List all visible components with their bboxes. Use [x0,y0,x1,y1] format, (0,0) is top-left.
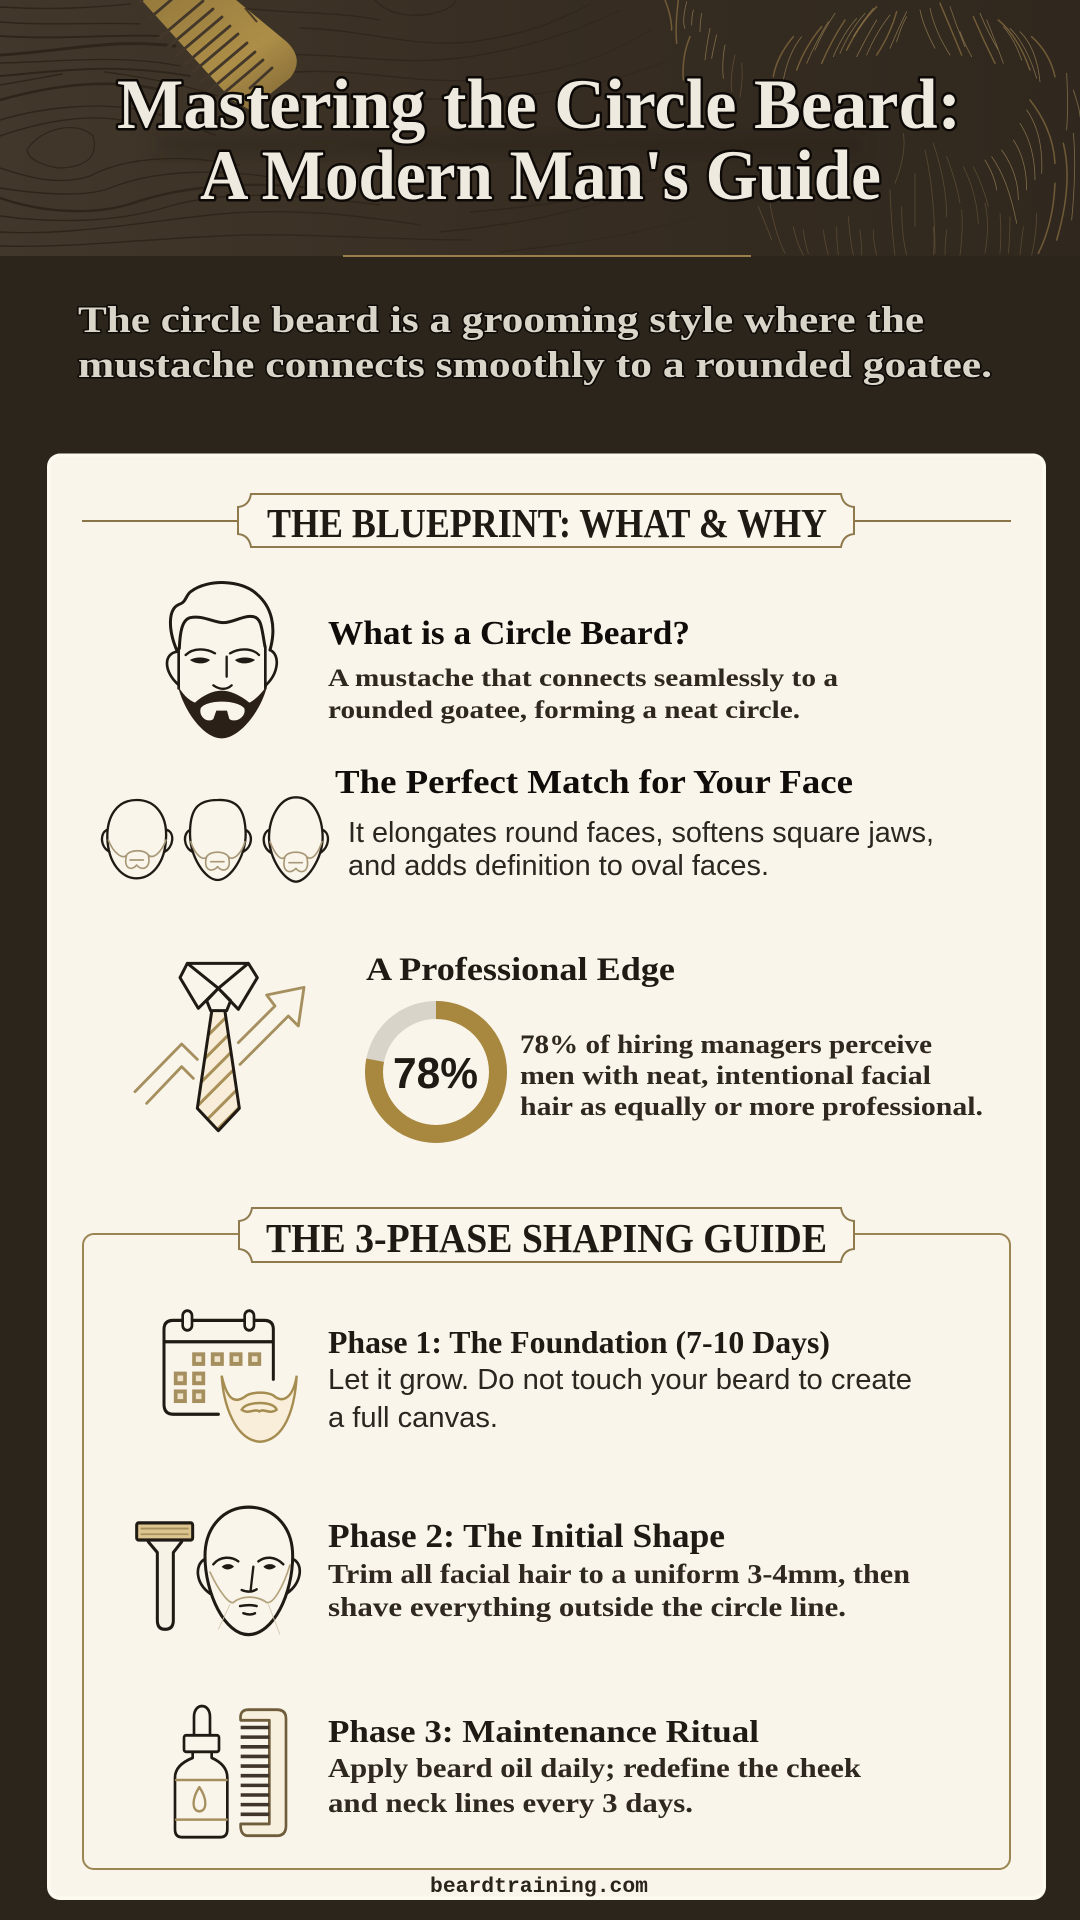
icon: beard oil bottle and comb [175,1706,286,1837]
description [348,817,934,882]
statistic description: men with neat, intentional facial [520,1060,931,1090]
heading: Phase 3: Maintenance Ritual [328,1713,759,1749]
icon: razor and shaved face [137,1507,300,1635]
section rule [82,520,1011,522]
description: rounded goatee, forming a neat circle. [328,697,800,724]
description: and neck lines every 3 days. [328,1788,693,1818]
description [328,1364,912,1434]
description [328,1753,861,1818]
item: the perfect match [102,764,934,882]
statistic description: hair as equally or more professional. [520,1091,983,1121]
description [328,665,839,724]
section frame [83,1234,1010,1869]
panel: main card [47,454,1046,1900]
heading banner: the blueprint: THE BLUEPRINT: WHAT & WHY [267,500,827,546]
section: the 3-phase shaping guide [83,1208,1010,1869]
heading: Phase 1: The Foundation (7-10 Days) [328,1324,830,1360]
description [328,1559,910,1622]
section: the blueprint [82,494,1011,1134]
statistic description [520,1029,983,1121]
heading: A Professional Edge [366,952,675,988]
icon: wooden comb [137,0,297,110]
title line 2: A Modern Man's Guide [200,137,881,215]
donut chart: 78% [374,1010,498,1134]
phase 2 [137,1507,910,1635]
heading: Phase 2: The Initial Shape [328,1518,725,1555]
title line 1: Mastering the Circle Beard: [117,66,961,144]
heading banner: 3-phase guide: THE 3-PHASE SHAPING GUIDE [266,1215,827,1261]
icon: calendar and beard [164,1311,297,1442]
intro line 1: The circle beard is a grooming style where the [78,300,924,341]
title [117,66,961,215]
wood grain [0,0,700,252]
description: Trim all facial hair to a uniform 3-4mm, then [328,1559,910,1589]
icon: three face shapes [102,797,328,882]
description: Let it grow. Do not touch your beard to create [328,1364,912,1396]
description: It elongates round faces, softens square jaws, [348,817,934,849]
icon: beard hair strands [665,0,1080,255]
phase 3 [175,1706,861,1837]
statistic description: 78% of hiring managers perceive [520,1029,932,1059]
title divider [343,255,751,257]
soft shadow behind title [160,136,860,154]
description: Apply beard oil daily; redefine the cheek [328,1753,861,1783]
item: what is a circle beard [167,583,839,738]
header wood band [0,0,1080,256]
icon: bearded face [167,583,277,738]
phase 1 [164,1311,912,1442]
item: a professional edge [135,952,983,1134]
intro text [78,300,992,386]
footer url: beardtraining.com [430,1875,648,1899]
intro line 2: mustache connects smoothly to a rounded goatee. [78,345,992,386]
description: and adds definition to oval faces. [348,850,769,882]
icon: tie with rising arrows [135,963,304,1133]
description: A mustache that connects seamlessly to a [328,665,839,692]
donut chart: 78%: 78% [393,1049,478,1098]
description: a full canvas. [328,1402,498,1434]
heading: What is a Circle Beard? [328,615,690,652]
heading: The Perfect Match for Your Face [335,764,853,801]
description: shave everything outside the circle line. [328,1592,846,1622]
